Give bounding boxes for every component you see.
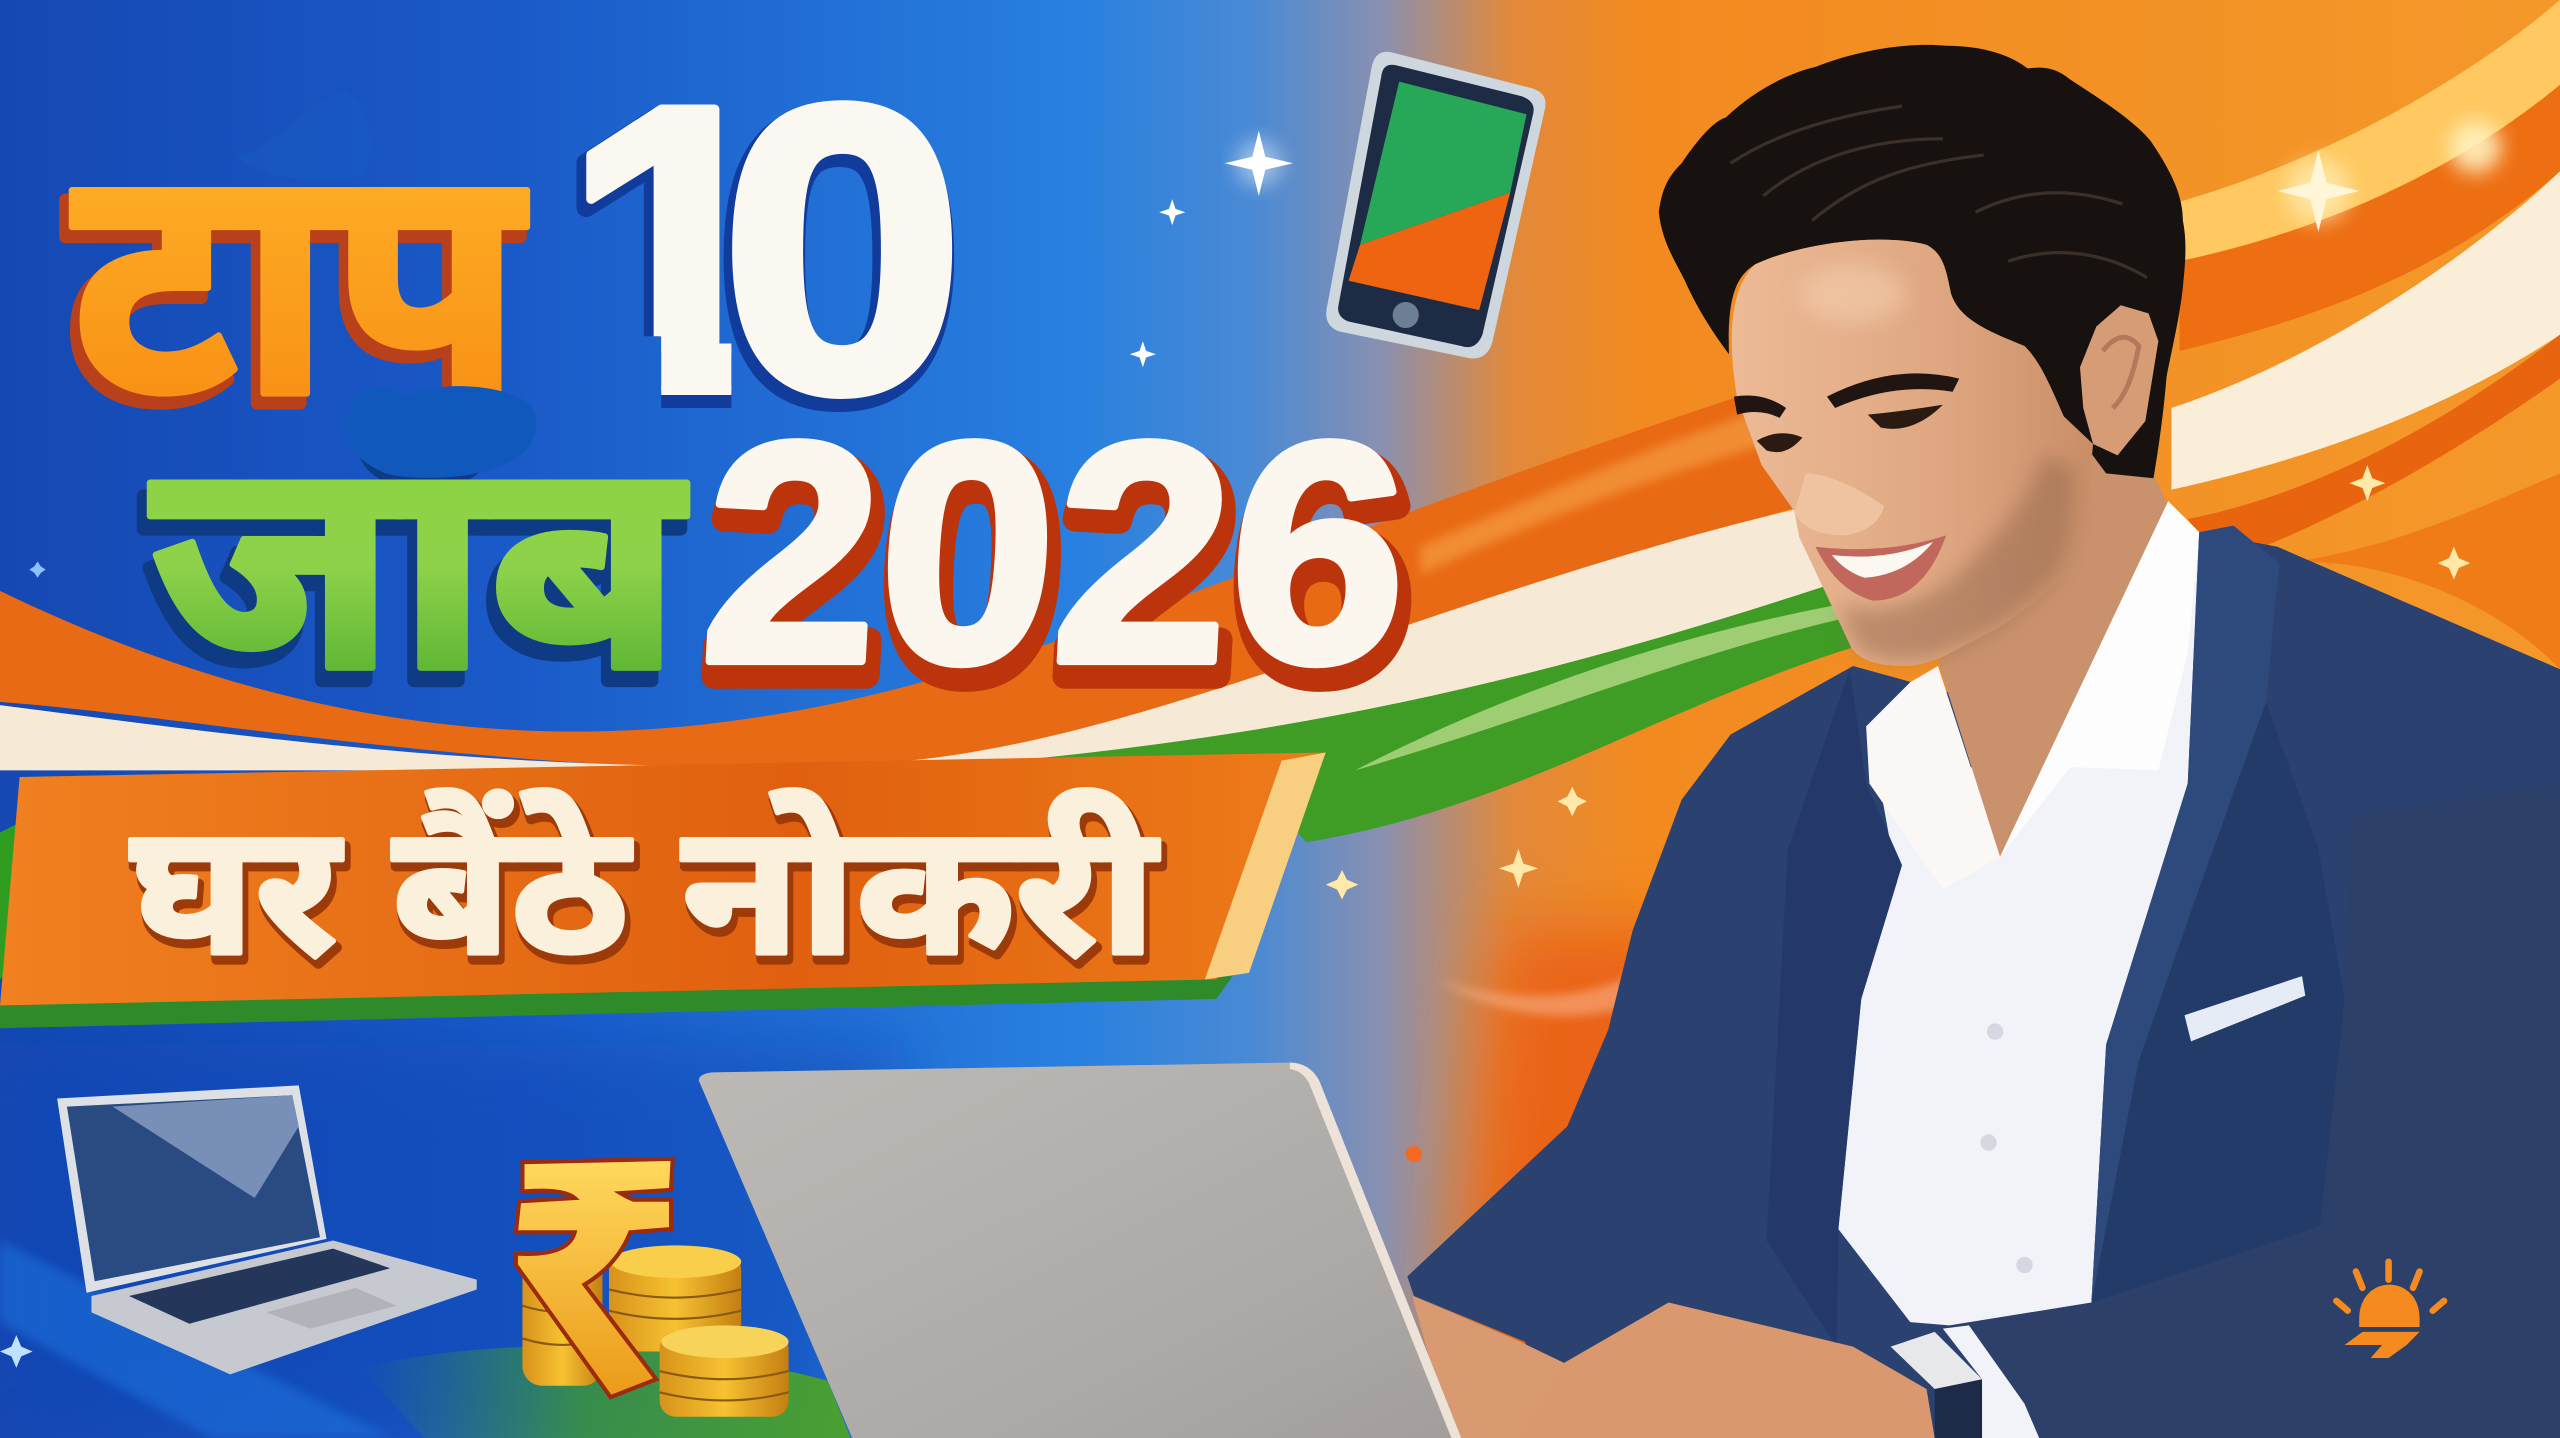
beard stubble xyxy=(1838,457,2074,660)
rupee symbol xyxy=(516,1159,673,1397)
pocket square xyxy=(2184,976,2305,1041)
icon: smartphone xyxy=(1326,52,1546,358)
right lapel xyxy=(2091,526,2279,1303)
title: टाप: टाप xyxy=(72,98,530,463)
sleeve near arm xyxy=(1949,783,2560,1438)
nose xyxy=(1794,473,1884,535)
eyebrows xyxy=(1734,373,1959,418)
title: टाप: टाप xyxy=(65,108,524,473)
left lapel xyxy=(1767,669,1902,1347)
smile xyxy=(1816,535,1946,601)
hair xyxy=(1659,45,2185,478)
title: 2026: 2026 xyxy=(700,393,1421,743)
eyes xyxy=(1757,405,1943,452)
icon: small laptop xyxy=(57,1085,477,1374)
left collar xyxy=(1866,666,2000,890)
sparkles left xyxy=(0,131,1293,1368)
logo: sun xyxy=(2336,1262,2444,1358)
title: 10: 0 xyxy=(720,22,965,477)
person: man with laptop xyxy=(1407,45,2560,1438)
title: 10: 0 xyxy=(717,30,962,485)
shirt buttons xyxy=(1980,1023,2033,1273)
chest panel xyxy=(2091,702,2344,1303)
watch xyxy=(1891,1332,1982,1438)
blazer xyxy=(1407,532,2560,1438)
title: 2026: 2026 xyxy=(695,378,1416,728)
face xyxy=(1732,240,2093,666)
banner text: घर बैंठे नोकरी xyxy=(131,787,1159,992)
right collar xyxy=(2000,501,2199,857)
near hand xyxy=(1517,1303,1935,1438)
icon: rupee and coins xyxy=(359,1159,851,1438)
foreground laptop lid xyxy=(699,1063,1461,1438)
banner xyxy=(0,752,1326,1028)
title: जॉब: जॉब xyxy=(150,399,689,731)
cloud smudge decorations xyxy=(237,90,536,478)
shirt xyxy=(1838,506,2199,1325)
far hand xyxy=(1412,1296,1564,1438)
hair highlights xyxy=(1731,106,2147,277)
tricolour flag wave xyxy=(0,0,2560,979)
ear xyxy=(2080,305,2158,455)
forehead highlight xyxy=(1801,264,1905,323)
title: जॉब: जॉब xyxy=(144,412,683,744)
neck xyxy=(1938,444,2168,857)
banner text: घर बैंठे नोकरी xyxy=(134,794,1163,999)
cuff xyxy=(1943,1325,2039,1438)
title: 10: 1 xyxy=(558,30,785,485)
title: 10 xyxy=(576,100,954,412)
sparkles right xyxy=(1326,121,2501,1162)
title: 10: 1 xyxy=(563,22,790,477)
